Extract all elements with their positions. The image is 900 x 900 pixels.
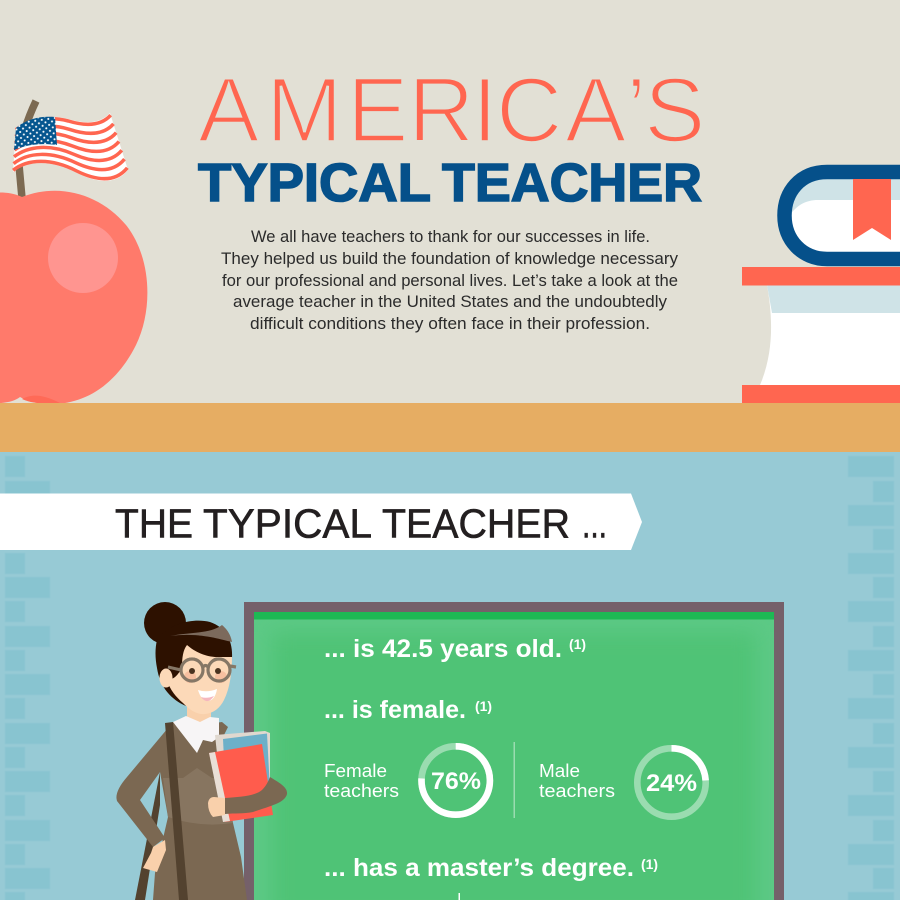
smile — [198, 689, 217, 701]
illustration: apple with flag — [0, 101, 147, 404]
brick wall pattern left — [5, 456, 50, 900]
illustration: stack of books — [742, 172, 900, 404]
female teachers donut chart — [324, 746, 490, 815]
female teachers donut chart: 76% — [431, 768, 481, 795]
glasses — [168, 659, 236, 681]
female teachers donut chart: teachers — [324, 781, 399, 801]
title line: America's: AMERICA’S — [198, 60, 705, 162]
hand on hip — [143, 840, 166, 872]
fact: degree: (1) — [641, 856, 658, 872]
fact: age: ... is 42.5 years old. — [324, 635, 562, 663]
forearm and hand — [208, 777, 287, 817]
fact: gender: (1) — [475, 698, 492, 714]
intro text: We all have teachers to thank for our successes in life. — [251, 227, 650, 246]
dress and arm — [116, 722, 247, 900]
US flag — [13, 113, 128, 181]
eyes — [189, 668, 195, 674]
section heading banner: ... — [582, 500, 607, 546]
desk — [0, 403, 900, 452]
hair back and bun — [144, 602, 232, 706]
degree chart axis line — [458, 893, 460, 900]
red book — [209, 744, 273, 822]
collar — [173, 716, 219, 753]
male teachers donut chart — [539, 748, 706, 817]
hair highlight — [170, 625, 232, 642]
intro text — [221, 227, 678, 333]
back bag strap — [135, 772, 160, 900]
fact: gender: ... is female. — [324, 696, 466, 724]
illustration: teacher — [116, 602, 287, 900]
bottom book — [742, 267, 900, 404]
female teachers donut chart: Female — [324, 761, 387, 781]
cheeks — [184, 671, 196, 683]
divider — [514, 742, 515, 818]
top book — [784, 172, 900, 259]
intro text: difficult conditions they often face in their profession. — [250, 314, 650, 333]
fact: age: (1) — [569, 636, 586, 652]
blue book — [215, 731, 270, 800]
fact: degree: ... has a master’s degree. — [324, 854, 634, 882]
panel: header — [0, 0, 900, 404]
panel: typical teacher section — [0, 452, 900, 900]
apple body — [0, 191, 147, 404]
brick wall pattern right — [848, 456, 894, 900]
section heading banner: TYPICAL — [203, 500, 372, 546]
male teachers donut chart: 24% — [646, 770, 697, 797]
section heading banner: TEACHER — [382, 500, 570, 546]
bookmark — [853, 179, 891, 240]
title — [198, 60, 705, 213]
section heading banner — [0, 494, 642, 550]
intro text: for our professional and personal lives. Let’s take a look at the — [222, 271, 678, 290]
title line: Typical Teacher: TYPICAL — [198, 153, 431, 213]
title line: Typical Teacher: TEACHER — [442, 153, 702, 213]
front bag strap — [165, 722, 188, 900]
male teachers donut chart: Male — [539, 761, 580, 781]
eyebrows — [187, 658, 224, 660]
title line: Typical Teacher — [198, 153, 702, 213]
intro text: They helped us build the foundation of knowledge necessary — [221, 249, 678, 268]
chalkboard — [244, 602, 784, 900]
male teachers donut chart: teachers — [539, 781, 615, 801]
intro text: average teacher in the United States and the undoubtedly — [233, 292, 667, 311]
section heading banner: THE — [115, 500, 193, 546]
apple stem — [19, 101, 36, 198]
face and neck — [160, 625, 236, 727]
